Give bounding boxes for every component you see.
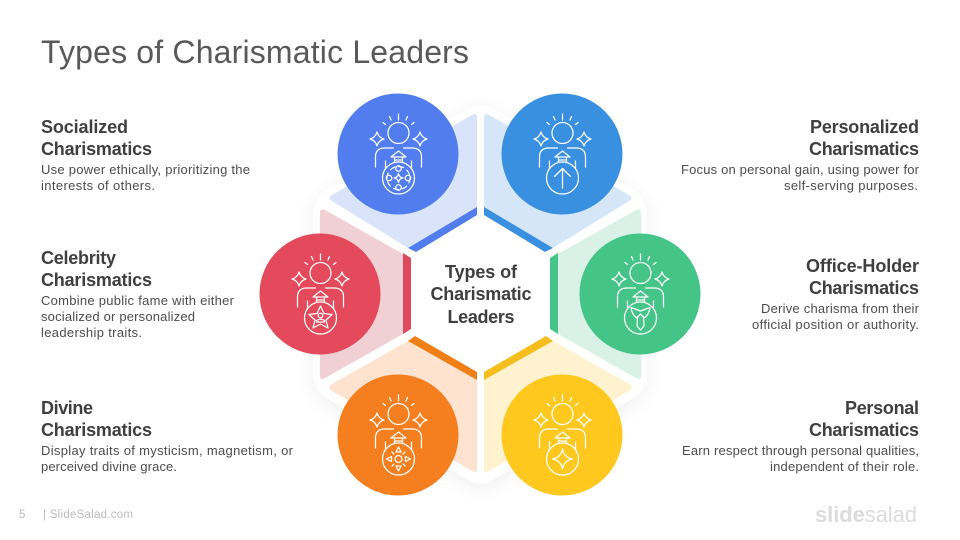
text block: office-holder: [752, 256, 920, 332]
text block: personal: Personal: [845, 398, 919, 418]
text block: divine: perceived divine grace.: [41, 459, 177, 474]
center label: Leaders: [448, 307, 514, 327]
text block: socialized: Socialized: [41, 117, 128, 137]
text block: personalized: Focus on personal gain, using power for: [681, 162, 920, 177]
text block: celebrity: Charismatics: [41, 270, 152, 290]
text block: personal: Earn respect through personal qualities,: [682, 443, 919, 458]
icon circle: personal: [502, 374, 622, 496]
icon circle: socialized: [338, 94, 458, 214]
footer: page number: 5: [19, 509, 25, 521]
text block: celebrity: leadership traits.: [41, 325, 142, 340]
text block: office-holder: Office-Holder: [806, 256, 919, 276]
center label: [430, 262, 532, 327]
icon circle: celebrity: [260, 234, 380, 354]
text block: socialized: Charismatics: [41, 139, 152, 159]
footer: website: | SlideSalad.com: [43, 509, 133, 521]
text block: celebrity: socialized or personalized: [41, 309, 195, 324]
text block: socialized: interests of others.: [41, 178, 155, 193]
text block: personalized: Personalized: [810, 117, 919, 137]
text block: divine: Divine: [41, 398, 93, 418]
icon circle: personalized: [502, 94, 622, 214]
segment: office-holder: [550, 209, 641, 379]
text block: divine: Charismatics: [41, 420, 152, 440]
text block: divine: [41, 398, 294, 474]
text block: personal: independent of their role.: [770, 459, 919, 474]
hexagon backdrop: [313, 105, 647, 484]
center label: Charismatic: [430, 284, 532, 304]
text block: personal: Charismatics: [809, 420, 919, 440]
footer: logo: slidesalad: [815, 502, 917, 527]
segment: divine: [330, 336, 477, 472]
title: Types of Charismatic Leaders: [41, 34, 469, 70]
center label: Types of: [445, 262, 518, 282]
text block: celebrity: [41, 248, 235, 340]
text block: divine: Display traits of mysticism, magnetism, or: [41, 443, 294, 458]
segment: celebrity: [320, 209, 411, 379]
text block: socialized: Use power ethically, prioritizing the: [41, 162, 250, 177]
text block: office-holder: Derive charisma from their: [761, 301, 920, 316]
text block: celebrity: Celebrity: [41, 248, 116, 268]
text block: personalized: Charismatics: [809, 139, 919, 159]
text block: celebrity: Combine public fame with either: [41, 293, 235, 308]
icon circle: divine: [338, 374, 458, 496]
text block: office-holder: Charismatics: [809, 278, 919, 298]
hexagon diagram: [260, 94, 700, 496]
text block: personalized: self-serving purposes.: [784, 178, 918, 193]
text block: personalized: [681, 117, 920, 193]
text block: office-holder: official position or authority.: [752, 317, 919, 332]
segment: personal: [484, 336, 632, 472]
text block: socialized: [41, 117, 250, 193]
icon circle: office-holder: [580, 234, 700, 354]
segment: personalized: [484, 114, 632, 252]
segment: socialized: [330, 114, 477, 252]
text block: personal: [682, 398, 919, 474]
